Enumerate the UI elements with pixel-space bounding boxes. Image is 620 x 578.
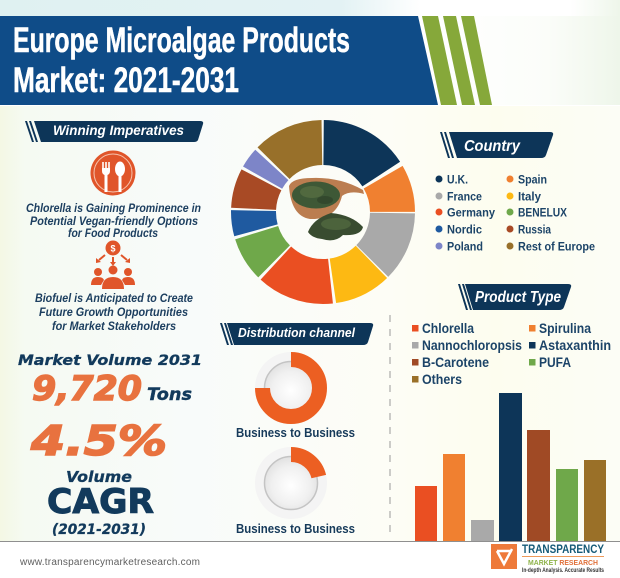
icon: fork and spoon <box>90 150 136 196</box>
badge: country <box>440 132 553 158</box>
cagr period: (2021-2031) <box>52 522 146 538</box>
text: chlorella imperative: Potential Vegan-friendly Options <box>30 216 198 228</box>
text: chlorella imperative: Chlorella is Gaining Prominence in <box>26 203 201 215</box>
panel: distribution channel <box>220 323 373 536</box>
legend: countries left column: Nordic <box>447 222 482 236</box>
icon: money and people: $ <box>110 244 116 254</box>
title: Europe Microalgae Products <box>13 21 350 60</box>
logo: transparency market research: TRANSPARENCY <box>522 544 604 556</box>
badge: winning imperatives <box>25 121 203 142</box>
website url: www.transparencymarketresearch.com <box>19 557 200 568</box>
header banner <box>0 16 492 105</box>
donut chart: country share <box>254 142 392 282</box>
image: spoon with algae powder <box>289 178 364 240</box>
legend: countries left column: Poland <box>447 240 483 254</box>
badge: product type <box>458 284 571 310</box>
text: chlorella imperative <box>26 203 201 240</box>
banner background <box>0 16 438 105</box>
legend: countries left column: U.K. <box>447 172 468 186</box>
title: Market: 2021-2031 <box>13 61 239 100</box>
legend: countries right column: Italy <box>518 190 541 204</box>
market volume unit: Tons <box>147 385 192 405</box>
panel: country legend <box>436 132 595 254</box>
logo: transparency market research: MARKET RESEARCH <box>528 558 598 567</box>
panel: winning imperatives <box>25 121 203 333</box>
legend: product types: Astaxanthin <box>539 337 611 353</box>
legend: product types: Nannochloropsis <box>422 337 522 353</box>
legend: product types: Spirulina <box>539 320 591 336</box>
text: biofuel imperative: for Market Stakeholders <box>52 321 176 333</box>
legend: product types: Others <box>422 371 462 387</box>
badge: winning imperatives: Winning Imperatives <box>53 122 184 138</box>
donut: first channel <box>255 352 327 424</box>
banner green stripes <box>422 16 492 105</box>
legend: product types: B-Carotene <box>422 354 489 370</box>
icon: money and people <box>91 240 135 289</box>
text: biofuel imperative: Biofuel is Anticipated to Create <box>35 293 194 305</box>
label: second channel: Business to Business <box>236 521 355 536</box>
cagr value: 4.5% <box>30 417 167 465</box>
panel: product type <box>412 284 611 541</box>
badge: distribution channel <box>220 323 373 345</box>
legend: product types: Chlorella <box>422 320 474 336</box>
logo: transparency market research <box>491 544 605 574</box>
badge: product type: Product Type <box>475 289 561 306</box>
legend: countries right column: BENELUX <box>518 206 567 220</box>
legend: countries left column: Germany <box>447 206 495 220</box>
cagr label: CAGR <box>47 482 154 522</box>
label: first channel: Business to Business <box>236 425 355 440</box>
legend: product types: PUFA <box>539 354 571 370</box>
legend: countries right column <box>506 172 595 254</box>
legend: countries left column: France <box>447 190 482 204</box>
text: biofuel imperative: Future Growth Opportunities <box>39 307 188 319</box>
title <box>13 21 350 100</box>
donut: second channel <box>255 447 327 519</box>
market volume heading: Market Volume 2031 <box>18 353 202 369</box>
bar chart: product types <box>415 393 606 541</box>
volume label: Volume <box>66 468 132 486</box>
legend: countries right column: Russia <box>518 222 551 236</box>
legend: countries left column <box>436 172 495 254</box>
legend: countries right column: Spain <box>518 172 547 186</box>
legend: countries right column: Rest of Europe <box>518 240 595 254</box>
panel: key statistics <box>18 353 202 538</box>
text: chlorella imperative: for Food Products <box>68 228 158 240</box>
badge: distribution channel: Distribution channel <box>238 325 355 340</box>
text: biofuel imperative <box>35 293 194 333</box>
footer <box>19 544 605 574</box>
badge: country: Country <box>464 138 521 155</box>
market volume value: 9,720 <box>32 369 142 409</box>
legend: product types <box>412 320 611 387</box>
